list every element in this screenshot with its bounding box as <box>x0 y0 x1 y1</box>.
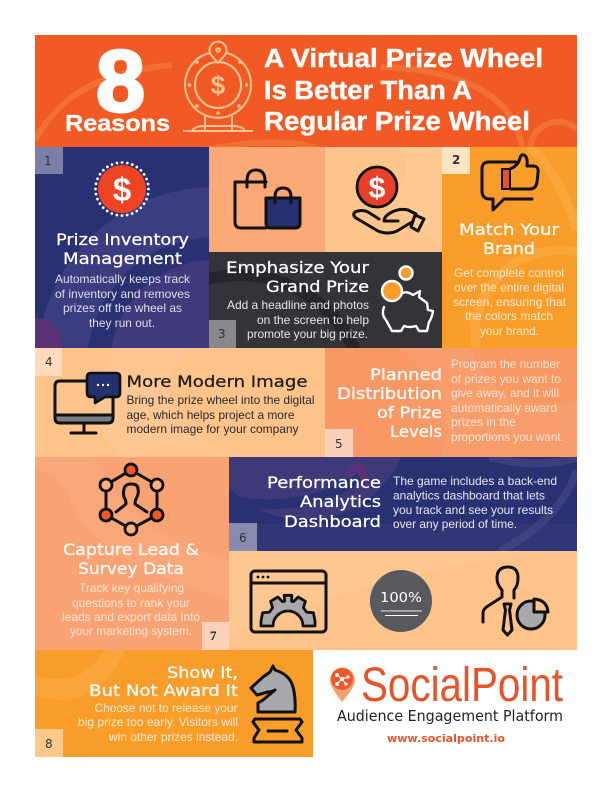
panel: 2 Match Your Brand <box>442 147 577 348</box>
tagline: Audience Engagement Platform <box>337 707 563 725</box>
icon: dollar medal <box>96 162 148 216</box>
number badge 8: 8 <box>45 737 53 751</box>
heading: Emphasize Your <box>226 258 369 277</box>
heading: Planned <box>370 365 442 384</box>
body text: big prize too early. Visitors will <box>78 715 238 729</box>
heading: Performance <box>267 473 381 492</box>
number badge 5 <box>325 429 353 457</box>
panel: coin in hand <box>325 147 442 252</box>
title: Regular Prize Wheel <box>264 108 530 136</box>
icon: 100 percent badge <box>370 570 432 632</box>
heading: Survey Data <box>78 559 184 578</box>
body text: give away, and it will <box>451 386 559 400</box>
panel: 3 Emphasize Your Grand Prize <box>209 252 442 348</box>
panel: 7 Capture Lead and Survey Data <box>35 457 229 650</box>
icon: network person <box>100 464 163 535</box>
heading: Dashboard <box>284 512 381 531</box>
heading <box>63 540 199 578</box>
body text: The game includes a back-end <box>393 474 557 488</box>
body text: analytics dashboard that lets <box>393 488 545 502</box>
number badge 1: 1 <box>44 154 52 168</box>
heading <box>56 230 189 268</box>
number badge 4 <box>35 348 62 376</box>
body text <box>451 357 564 444</box>
body text: Automatically keeps track <box>55 272 191 286</box>
number badge 2: 2 <box>452 153 460 167</box>
body text: they run out. <box>89 316 155 330</box>
body text: on the screen to help <box>257 313 369 327</box>
heading <box>267 473 381 531</box>
icon: 100 percent badge: 100% <box>380 590 422 606</box>
icon: coin over hand: $ <box>369 172 386 205</box>
body text: your marketing system. <box>70 624 192 638</box>
number badge 7 <box>202 622 229 650</box>
body text: over any period of time. <box>393 517 517 531</box>
title: Is Better Than A <box>264 77 472 105</box>
number badge 2 <box>442 147 470 174</box>
logo wordmark: SocialPoint <box>361 659 563 712</box>
heading: Prize Inventory <box>56 230 189 249</box>
panel: 8 Show It, But Not Award It <box>35 650 313 757</box>
panel: 1 Prize Inventory Management <box>35 147 209 348</box>
number badge 6: 6 <box>239 531 247 545</box>
heading: Analytics <box>300 492 381 511</box>
heading: More Modern Image <box>126 372 308 391</box>
body text: proportions you want. <box>451 430 564 444</box>
icon: location pin logo <box>330 668 355 702</box>
number badge 4: 4 <box>45 355 53 369</box>
heading: Show It, <box>167 663 238 682</box>
body text: Track key qualifying <box>79 581 184 595</box>
heading <box>89 663 238 700</box>
body text: of inventory and removes <box>55 287 190 301</box>
body text: your brand. <box>480 324 539 338</box>
heading <box>226 258 369 296</box>
body text: automatically award <box>451 401 557 415</box>
body text: age, which helps project a more <box>126 408 295 422</box>
body text: questions to rank your <box>72 596 190 610</box>
number badge 6 <box>229 523 257 551</box>
body text: of prizes you want to <box>451 372 561 386</box>
heading: Brand <box>483 239 535 258</box>
body text: Bring the prize wheel into the digital <box>126 393 314 407</box>
panel: SocialPoint logo <box>330 659 563 745</box>
body text: prizes off the wheel as <box>63 301 182 315</box>
body text <box>62 581 200 638</box>
title: A Virtual Prize Wheel <box>264 45 543 73</box>
icon: chess knight <box>251 666 302 742</box>
body text: win other prizes instead. <box>108 730 238 744</box>
body text <box>78 701 238 744</box>
body text <box>393 474 557 531</box>
body text: modern image for your company <box>126 422 298 436</box>
icon: monitor with chat bubble <box>55 373 120 433</box>
body text: prizes in the <box>451 415 516 429</box>
body text: promote your big prize. <box>247 327 368 341</box>
body text: Choose not to release your <box>94 701 238 715</box>
word: Reasons: Reasons <box>65 110 170 136</box>
heading: Management <box>63 249 182 268</box>
body text <box>126 393 314 436</box>
heading: of Prize <box>377 403 442 422</box>
number badge 5: 5 <box>335 437 343 451</box>
number badge 3: 3 <box>218 327 226 341</box>
icon: piggy bank with coins <box>382 266 433 331</box>
panel: 6 Performance Analytics Dashboard <box>229 457 577 551</box>
body text: Add a headline and photos <box>227 298 369 312</box>
icon: browser window with gear <box>251 571 326 632</box>
body text: Get complete control <box>454 266 564 280</box>
website url: www.socialpoint.io <box>387 732 505 745</box>
body text: over the entire digital <box>454 280 564 294</box>
heading: Levels <box>390 422 442 441</box>
icon: prize wheel <box>184 42 252 131</box>
title <box>264 45 543 136</box>
number badge 8 <box>35 729 63 757</box>
body text <box>227 298 369 341</box>
panel: header banner <box>35 33 577 150</box>
body text <box>453 266 567 338</box>
body text: leads and export data into <box>62 610 200 624</box>
body text: Program the number <box>451 357 560 371</box>
number badge 7: 7 <box>210 628 217 643</box>
heading: Grand Prize <box>266 277 369 296</box>
heading: Distribution <box>337 384 442 403</box>
big number 8: 8 <box>96 33 145 130</box>
body text: screen, ensuring that <box>453 295 567 309</box>
heading <box>337 365 442 441</box>
body text <box>55 272 191 330</box>
panel: 5 Planned Distribution of Prize Levels <box>325 348 577 457</box>
number badge 3 <box>209 320 236 348</box>
panel: shopping bags <box>209 147 325 252</box>
icon: dollar medal: $ <box>113 171 131 208</box>
icon: thumbs up speech bubble <box>482 155 538 210</box>
number badge 1 <box>35 147 63 174</box>
icon: prize wheel: $ <box>211 70 226 100</box>
heading: But Not Award It <box>89 681 238 700</box>
icon: shopping bags <box>235 170 300 228</box>
heading: Match Your <box>459 220 559 239</box>
panel: 4 More Modern Image <box>35 348 325 457</box>
heading: Capture Lead & <box>63 540 199 559</box>
panel: analytics icons <box>229 540 577 650</box>
body text: the colors match <box>465 309 553 323</box>
heading <box>459 220 559 258</box>
body text: you track and see your results <box>393 503 553 517</box>
icon: person with tie and pie chart <box>483 567 548 635</box>
